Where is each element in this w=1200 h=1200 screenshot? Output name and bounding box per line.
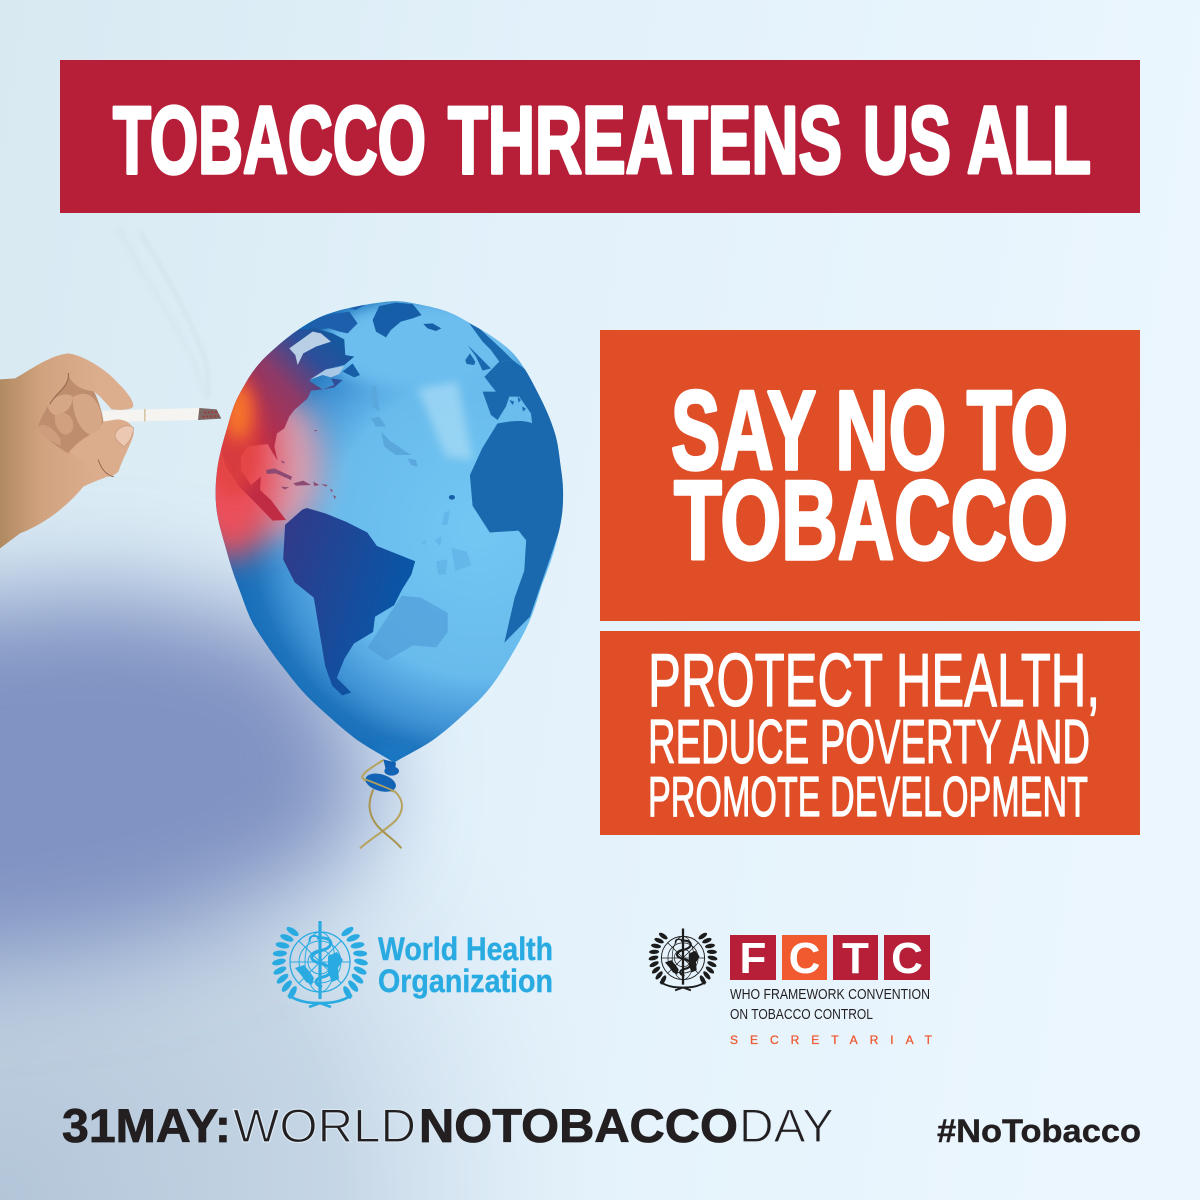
faint north Atlantic shapes [371, 386, 418, 467]
panel: protect health [600, 631, 1140, 835]
title banner: TOBACCO [113, 87, 426, 194]
pale pink heat fringe [228, 391, 323, 536]
thumb [70, 420, 134, 477]
FCTC name: ON TOBACCO CONTROL [730, 1006, 873, 1023]
faint Pacific islands [421, 510, 471, 575]
footer: 31 May World No Tobacco Day: WORLD [233, 1099, 416, 1152]
Africa [470, 421, 566, 643]
ring finger [55, 413, 73, 435]
title banner: ALL [967, 87, 1091, 194]
Hudson Bay light patch [289, 332, 331, 365]
thumbnail [115, 426, 133, 447]
Iceland [423, 323, 441, 331]
ribbon front [369, 789, 401, 848]
panel: Say no to tobacco [600, 330, 1140, 621]
northern map layer [206, 303, 563, 521]
knot neck [383, 759, 396, 771]
FCTC name [730, 986, 930, 1023]
title banner: US [863, 87, 951, 194]
knot lower bulb [363, 770, 398, 795]
Greenland [373, 303, 422, 337]
hand shape [0, 353, 134, 548]
faint Antarctica shape [367, 596, 448, 661]
red heat on left [184, 368, 279, 559]
footer: 31 May World No Tobacco Day: NOTOBACCO [419, 1099, 738, 1152]
blue neck shade [376, 751, 414, 762]
Newfoundland [343, 363, 360, 377]
WHO wordmark: Organization [378, 963, 553, 999]
balloon [216, 301, 564, 762]
footer: 31 May World No Tobacco Day: 31MAY: [62, 1099, 231, 1152]
WHO emblem blue [271, 921, 369, 1007]
FCTC name: WHO FRAMEWORK CONVENTION [730, 986, 930, 1003]
FCTC letter blocks: F [740, 934, 766, 983]
curled fold [48, 394, 73, 415]
crease lines [50, 373, 113, 477]
WHO wordmark: World Health [378, 931, 553, 967]
ribbon wrap [365, 779, 395, 792]
footer: 31 May World No Tobacco Day [62, 1099, 834, 1152]
Europe and Asia [483, 360, 563, 447]
FCTC letter blocks: C [891, 934, 923, 983]
WHO logo [271, 921, 553, 1007]
cigarette [103, 408, 221, 422]
footer: 31 May World No Tobacco Day: DAY [739, 1099, 834, 1152]
middle finger [73, 394, 102, 435]
Arctic islands [306, 304, 367, 333]
Scandinavia and Arctic Europe [465, 323, 513, 371]
FCTC letter blocks [730, 934, 930, 983]
hand holding cigarette [0, 353, 221, 548]
WHO wordmark [378, 931, 553, 999]
finger cavity shadow [38, 375, 103, 453]
secretariat: SECRETARIAT [730, 1033, 933, 1047]
WHO emblem black [648, 928, 718, 990]
North America [206, 328, 354, 521]
hashtag: #NoTobacco [937, 1113, 1141, 1149]
upper lightening [321, 299, 520, 391]
Gulf of St Lawrence light patch [309, 366, 344, 380]
small island dot [449, 495, 455, 500]
orange hotspot [224, 384, 252, 440]
knot upper bulb [384, 766, 399, 776]
little finger [38, 425, 61, 446]
title banner: THREATENS [448, 87, 842, 194]
FCTC logo [648, 928, 933, 1047]
Mediterranean islands [509, 397, 526, 412]
balloon knot and gold ribbon [360, 759, 402, 848]
window highlight [418, 382, 473, 460]
ribbon back [360, 760, 402, 848]
title banner [60, 60, 1140, 213]
FCTC letter blocks: C [789, 934, 820, 983]
world map and balloon shading [184, 299, 566, 767]
FCTC letter blocks: T [842, 934, 869, 983]
Caribbean islands [266, 430, 336, 499]
balloon body [216, 301, 563, 763]
South America [283, 508, 415, 696]
red glow over the coast [207, 368, 260, 498]
cigarette smoke [118, 228, 209, 398]
